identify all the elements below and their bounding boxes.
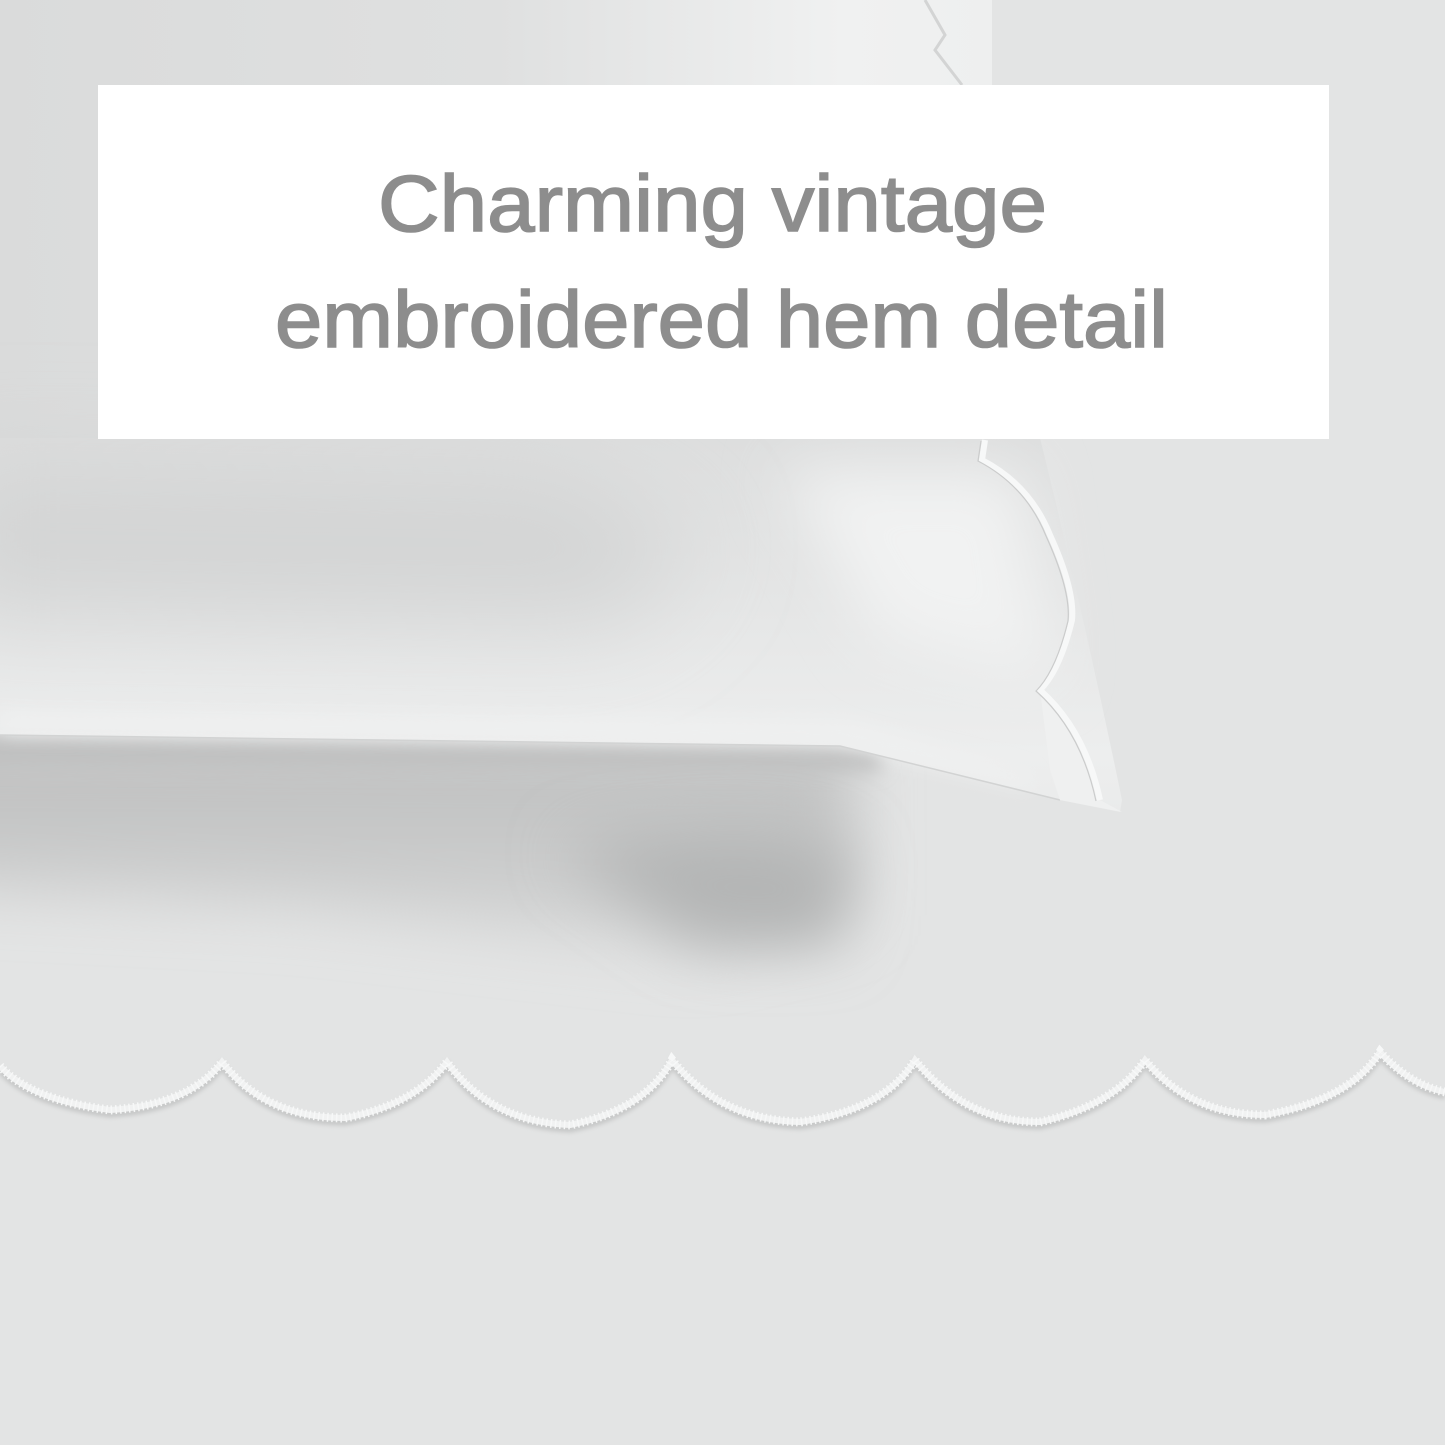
pillow soft shading <box>0 460 700 620</box>
main pillow <box>0 438 1122 812</box>
heading line 1: Charming vintage <box>378 159 1047 248</box>
pillow lower edge <box>0 735 1060 800</box>
sheet embroidered scallop hem <box>0 1052 1445 1129</box>
pillow embroidered scallop <box>982 440 1100 800</box>
heading line 2: embroidered hem detail <box>275 275 1168 364</box>
upper pillow behind the text panel <box>0 0 992 440</box>
text panel <box>98 85 1329 439</box>
pillow hem corner <box>1040 690 1122 812</box>
pillow cast shadow on sheet <box>0 735 880 950</box>
